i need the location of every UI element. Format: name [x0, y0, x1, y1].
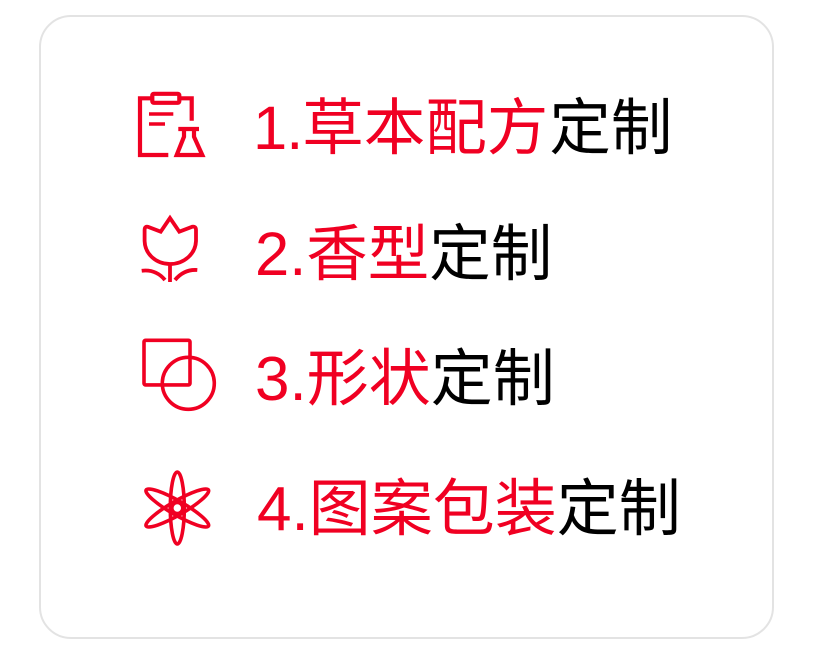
text: item 4: 4.图案包装定制: [257, 475, 681, 544]
text: item 2: 2.香型定制: [255, 220, 552, 289]
text: item 1: 1.草本配方定制: [253, 94, 672, 163]
text: item 3: 3.形状定制: [255, 345, 555, 414]
